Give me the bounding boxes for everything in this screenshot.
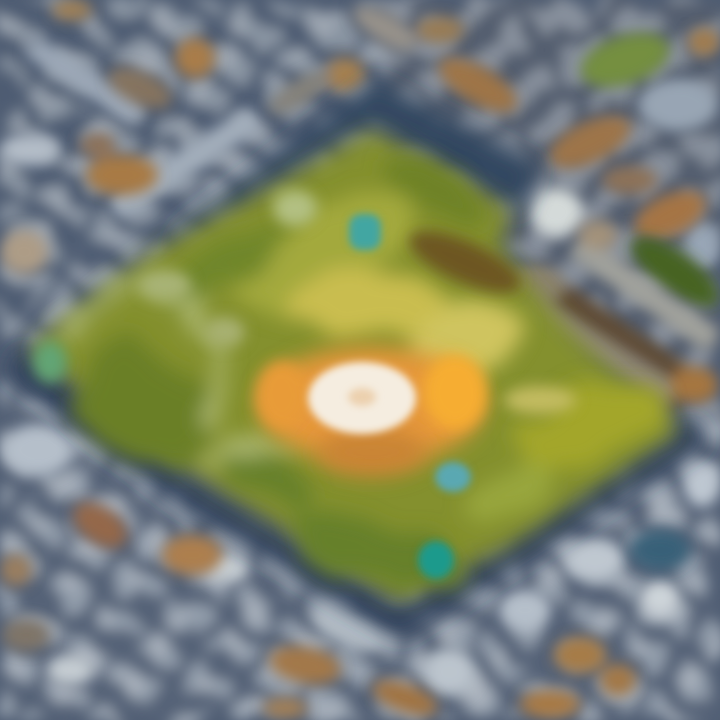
city blocks: orange roofs top: [263, 0, 720, 249]
city blocks: orange roofs bottom: [263, 530, 690, 720]
lawn shading: [54, 142, 675, 608]
green patch: top right park: [574, 23, 676, 97]
lawn highlights: [139, 190, 576, 414]
city blocks: orange roofs bottom left: [0, 493, 222, 651]
dark road: lower edge of park: [15, 360, 700, 622]
dark road: top of park: [170, 80, 540, 255]
teal marker: left: [33, 341, 67, 383]
teal marker: bottom: [418, 541, 454, 579]
city blocks: orange roofs top left: [0, 0, 215, 274]
teal marker: top: [349, 214, 381, 250]
green patch: right park: [621, 225, 720, 319]
plaza centre dot: [348, 388, 376, 406]
central park lawn: [28, 130, 680, 608]
tree band: park edge: [402, 219, 528, 305]
teal marker: centre: [435, 462, 471, 492]
buildings: right rows: [505, 220, 720, 414]
white building: near park: [529, 188, 583, 236]
orange central plaza: [256, 347, 487, 476]
white central circle: [308, 362, 416, 434]
